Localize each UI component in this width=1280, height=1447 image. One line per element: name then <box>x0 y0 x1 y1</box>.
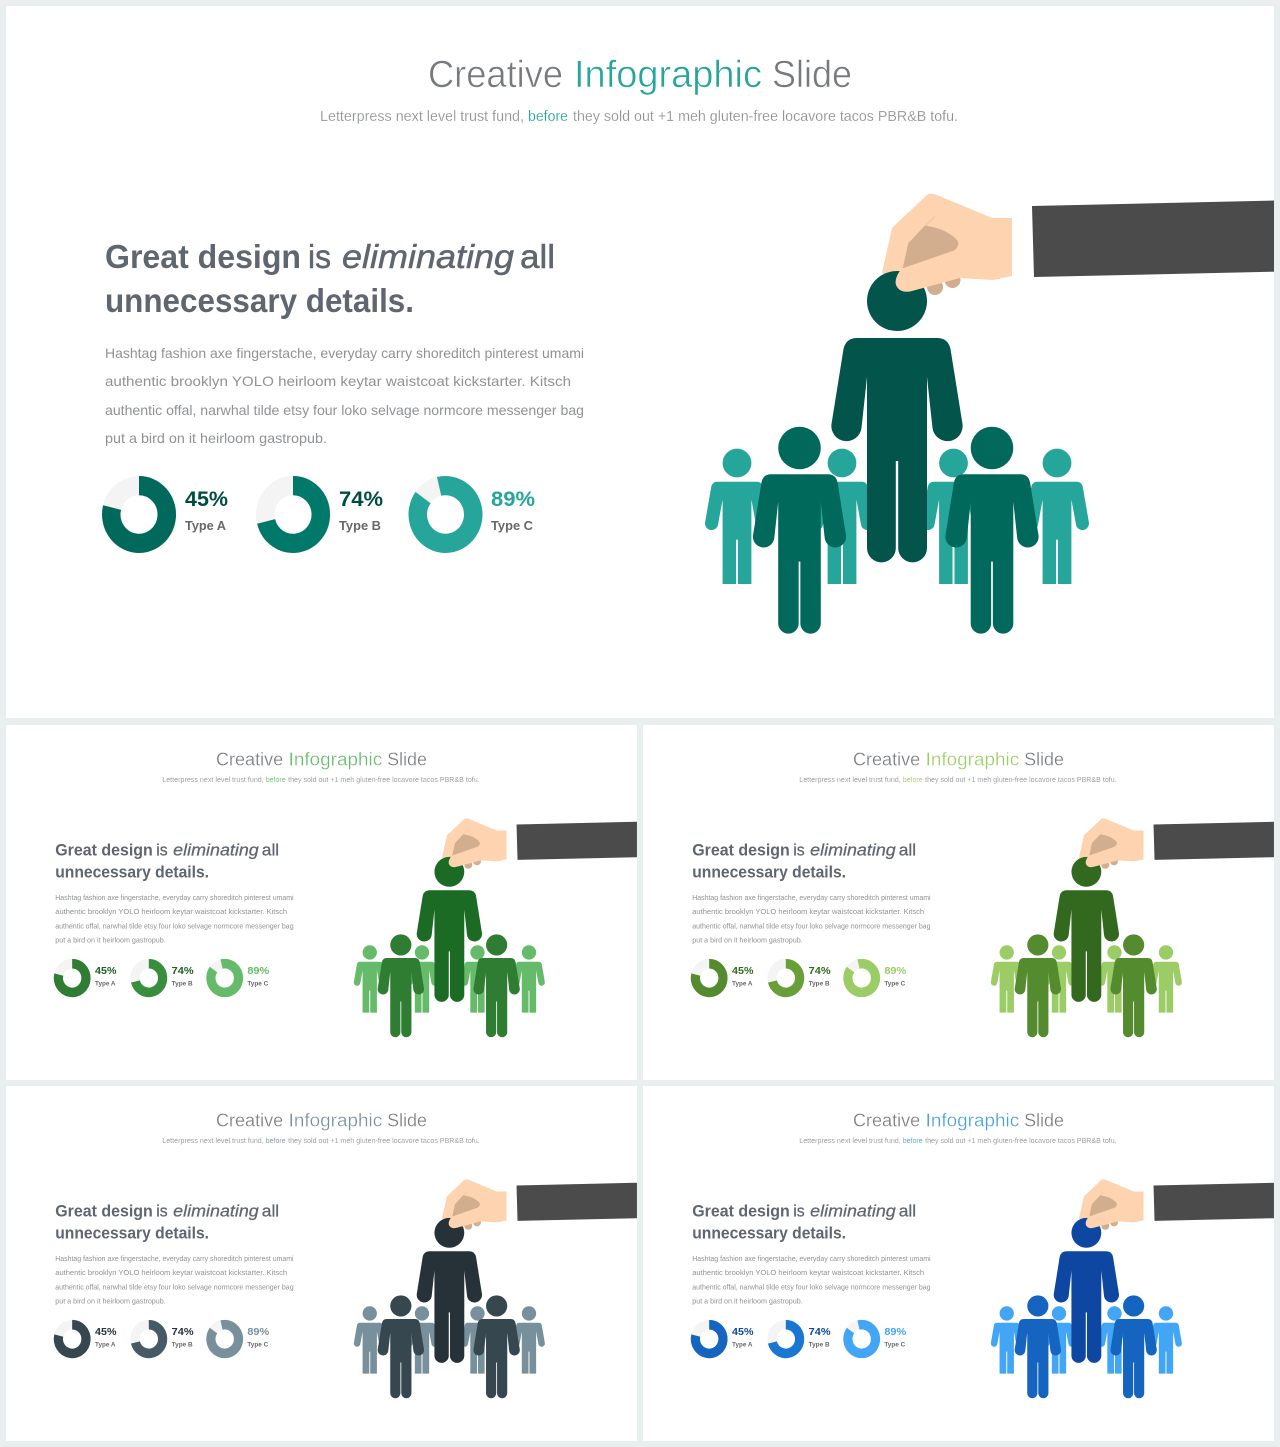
title <box>216 1110 427 1131</box>
heading: is <box>793 1202 805 1220</box>
subtitle: they sold out +1 meh gluten-free locavore tacos PBR&B tofu. <box>288 1136 480 1145</box>
stat: type C: 89% <box>247 966 269 977</box>
heading: is <box>156 1202 168 1220</box>
stat: type A: 45% <box>732 966 753 977</box>
stat: type C <box>884 1327 906 1349</box>
donut: type C <box>848 1325 876 1353</box>
title: Infographic <box>574 54 762 96</box>
subtitle: before <box>528 109 568 125</box>
stat: type A: Type A <box>95 1342 116 1349</box>
donut: type A <box>58 1325 86 1353</box>
stat: type C <box>247 966 269 988</box>
stat: type A: 45% <box>732 1327 753 1338</box>
heading <box>55 1202 279 1242</box>
stat: type B <box>809 1327 831 1349</box>
heading: Great design <box>55 841 153 859</box>
illustration: people and hand <box>705 194 1274 634</box>
body text: put a bird on it heirloom gastropub. <box>692 1298 803 1305</box>
title: Slide <box>387 749 427 770</box>
body text: authentic offal, narwhal tilde etsy four loko selvage normcore messenger bag <box>55 924 294 931</box>
title <box>853 1110 1064 1131</box>
heading: Great design <box>105 238 301 275</box>
donut: type A <box>695 1325 723 1353</box>
subtitle <box>162 775 480 784</box>
donut: type B <box>135 1325 163 1353</box>
stat: type C: 89% <box>247 1327 269 1338</box>
title <box>853 749 1064 770</box>
stat: type B: Type B <box>339 518 381 533</box>
heading: unnecessary details. <box>55 1224 209 1242</box>
body text <box>105 345 584 446</box>
stat: type B <box>339 488 383 533</box>
title: Slide <box>1024 1110 1064 1131</box>
body text: Hashtag fashion axe fingerstache, everyday carry shoreditch pinterest umami <box>692 895 931 902</box>
stat: type B <box>172 1327 194 1349</box>
illustration: people and hand <box>354 1179 637 1398</box>
stat: type A: 45% <box>95 1327 116 1338</box>
subtitle: they sold out +1 meh gluten-free locavore tacos PBR&B tofu. <box>925 1136 1117 1145</box>
stat: type C: Type C <box>884 981 906 988</box>
title: Creative <box>216 749 283 770</box>
panel: lime slide <box>643 725 1274 1080</box>
heading: Great design <box>692 841 790 859</box>
illustration: people and hand <box>354 818 637 1037</box>
stat: type C: 89% <box>884 1327 906 1338</box>
heading: eliminating <box>173 1202 259 1220</box>
title: Infographic <box>926 1110 1019 1131</box>
stat: type A: 45% <box>95 966 116 977</box>
title: Slide <box>387 1110 427 1131</box>
subtitle: before <box>266 1136 286 1145</box>
stat: type A <box>95 966 116 988</box>
panel: green slide <box>6 725 637 1080</box>
stat: type C: Type C <box>247 1342 269 1349</box>
heading: all <box>520 238 555 275</box>
stat: type B: Type B <box>172 981 193 988</box>
stat: type A <box>95 1327 116 1349</box>
body text: authentic brooklyn YOLO heirloom keytar waistcoat kickstarter. Kitsch <box>692 909 924 916</box>
body text: authentic offal, narwhal tilde etsy four loko selvage normcore messenger bag <box>692 924 931 931</box>
heading <box>105 238 555 319</box>
subtitle: they sold out +1 meh gluten-free locavore tacos PBR&B tofu. <box>288 775 480 784</box>
stat: type C <box>884 966 906 988</box>
title: Creative <box>216 1110 283 1131</box>
stat: type B: 74% <box>809 966 831 977</box>
subtitle: before <box>266 775 286 784</box>
heading: unnecessary details. <box>692 1224 846 1242</box>
stat: type C: 89% <box>884 966 906 977</box>
stat: type B: 74% <box>172 1327 194 1338</box>
title: Slide <box>772 54 852 96</box>
donut: type B <box>265 486 321 543</box>
subtitle <box>799 1136 1117 1145</box>
title: Creative <box>853 749 920 770</box>
title: Infographic <box>289 1110 382 1131</box>
stat: type A: Type A <box>732 981 753 988</box>
stat: type B: Type B <box>809 1342 830 1349</box>
stat: type B <box>172 966 194 988</box>
body text: authentic brooklyn YOLO heirloom keytar waistcoat kickstarter. Kitsch <box>55 909 287 916</box>
body text: authentic offal, narwhal tilde etsy four loko selvage normcore messenger bag <box>55 1285 294 1292</box>
heading <box>692 841 916 881</box>
stat: type A <box>732 966 753 988</box>
heading: eliminating <box>342 238 515 275</box>
stat: type C: Type C <box>884 1342 906 1349</box>
subtitle: Letterpress next level trust fund, <box>162 1136 264 1145</box>
subtitle: Letterpress next level trust fund, <box>799 775 901 784</box>
heading: all <box>262 1202 279 1220</box>
stat: type B: Type B <box>809 981 830 988</box>
heading: is <box>156 841 168 859</box>
body text: put a bird on it heirloom gastropub. <box>692 937 803 944</box>
donut: type A <box>111 486 167 543</box>
title: Creative <box>428 54 563 96</box>
stat: type A: 45% <box>185 488 228 511</box>
heading: unnecessary details. <box>105 282 414 319</box>
body text: put a bird on it heirloom gastropub. <box>105 430 327 446</box>
illustration: people and hand <box>991 818 1274 1037</box>
illustration: people and hand <box>991 1179 1274 1398</box>
donut: type A <box>695 964 723 992</box>
donut: type C <box>211 1325 239 1353</box>
stat: type C: Type C <box>247 981 269 988</box>
stat: type A <box>732 1327 753 1349</box>
title <box>428 54 852 96</box>
body text: Hashtag fashion axe fingerstache, everyday carry shoreditch pinterest umami <box>692 1256 931 1263</box>
panel: main teal slide <box>6 6 1274 718</box>
donut: type C <box>211 964 239 992</box>
stat: type C <box>247 1327 269 1349</box>
heading: eliminating <box>810 1202 896 1220</box>
heading <box>55 841 279 881</box>
stat: type A: Type A <box>95 981 116 988</box>
panel: slate slide <box>6 1086 637 1441</box>
subtitle: before <box>903 775 923 784</box>
stat: type A: Type A <box>185 518 227 533</box>
stat: type C: 89% <box>491 488 535 511</box>
body text: put a bird on it heirloom gastropub. <box>55 1298 166 1305</box>
body text <box>692 1256 931 1305</box>
donut: type B <box>772 964 800 992</box>
body text <box>692 895 931 944</box>
donut: type B <box>135 964 163 992</box>
heading: unnecessary details. <box>692 863 846 881</box>
stat: type B <box>809 966 831 988</box>
subtitle: Letterpress next level trust fund, <box>320 109 524 125</box>
body text: Hashtag fashion axe fingerstache, everyday carry shoreditch pinterest umami <box>55 895 294 902</box>
donut: type C <box>418 486 473 543</box>
subtitle: Letterpress next level trust fund, <box>162 775 264 784</box>
title: Infographic <box>926 749 1019 770</box>
body text: authentic brooklyn YOLO heirloom keytar waistcoat kickstarter. Kitsch <box>692 1270 924 1277</box>
heading: eliminating <box>810 841 896 859</box>
stat: type B: 74% <box>172 966 194 977</box>
body text: put a bird on it heirloom gastropub. <box>55 937 166 944</box>
body text <box>55 1256 294 1305</box>
heading: all <box>899 841 916 859</box>
stat: type A: Type A <box>732 1342 753 1349</box>
subtitle <box>320 109 958 125</box>
subtitle: Letterpress next level trust fund, <box>799 1136 901 1145</box>
heading: is <box>308 238 331 275</box>
heading: Great design <box>692 1202 790 1220</box>
title: Creative <box>853 1110 920 1131</box>
body text <box>55 895 294 944</box>
heading: all <box>262 841 279 859</box>
title: Slide <box>1024 749 1064 770</box>
subtitle: before <box>903 1136 923 1145</box>
heading: all <box>899 1202 916 1220</box>
heading: Great design <box>55 1202 153 1220</box>
heading: eliminating <box>173 841 259 859</box>
donut: type B <box>772 1325 800 1353</box>
subtitle <box>799 775 1117 784</box>
stat: type B: 74% <box>809 1327 831 1338</box>
body text: authentic brooklyn YOLO heirloom keytar waistcoat kickstarter. Kitsch <box>55 1270 287 1277</box>
donut: type C <box>848 964 876 992</box>
heading: is <box>793 841 805 859</box>
stat: type C <box>491 488 535 533</box>
title: Infographic <box>289 749 382 770</box>
subtitle <box>162 1136 480 1145</box>
body text: authentic offal, narwhal tilde etsy four loko selvage normcore messenger bag <box>692 1285 931 1292</box>
subtitle: they sold out +1 meh gluten-free locavore tacos PBR&B tofu. <box>573 109 958 125</box>
subtitle: they sold out +1 meh gluten-free locavore tacos PBR&B tofu. <box>925 775 1117 784</box>
stat: type C: Type C <box>491 518 534 533</box>
title <box>216 749 427 770</box>
panel: blue slide <box>643 1086 1274 1441</box>
heading <box>692 1202 916 1242</box>
heading: unnecessary details. <box>55 863 209 881</box>
stat: type A <box>185 488 228 533</box>
body text: authentic offal, narwhal tilde etsy four loko selvage normcore messenger bag <box>105 402 584 418</box>
body text: Hashtag fashion axe fingerstache, everyday carry shoreditch pinterest umami <box>105 345 584 361</box>
stat: type B: 74% <box>339 488 383 511</box>
body text: authentic brooklyn YOLO heirloom keytar waistcoat kickstarter. Kitsch <box>105 373 571 389</box>
body text: Hashtag fashion axe fingerstache, everyday carry shoreditch pinterest umami <box>55 1256 294 1263</box>
stat: type B: Type B <box>172 1342 193 1349</box>
donut: type A <box>58 964 86 992</box>
